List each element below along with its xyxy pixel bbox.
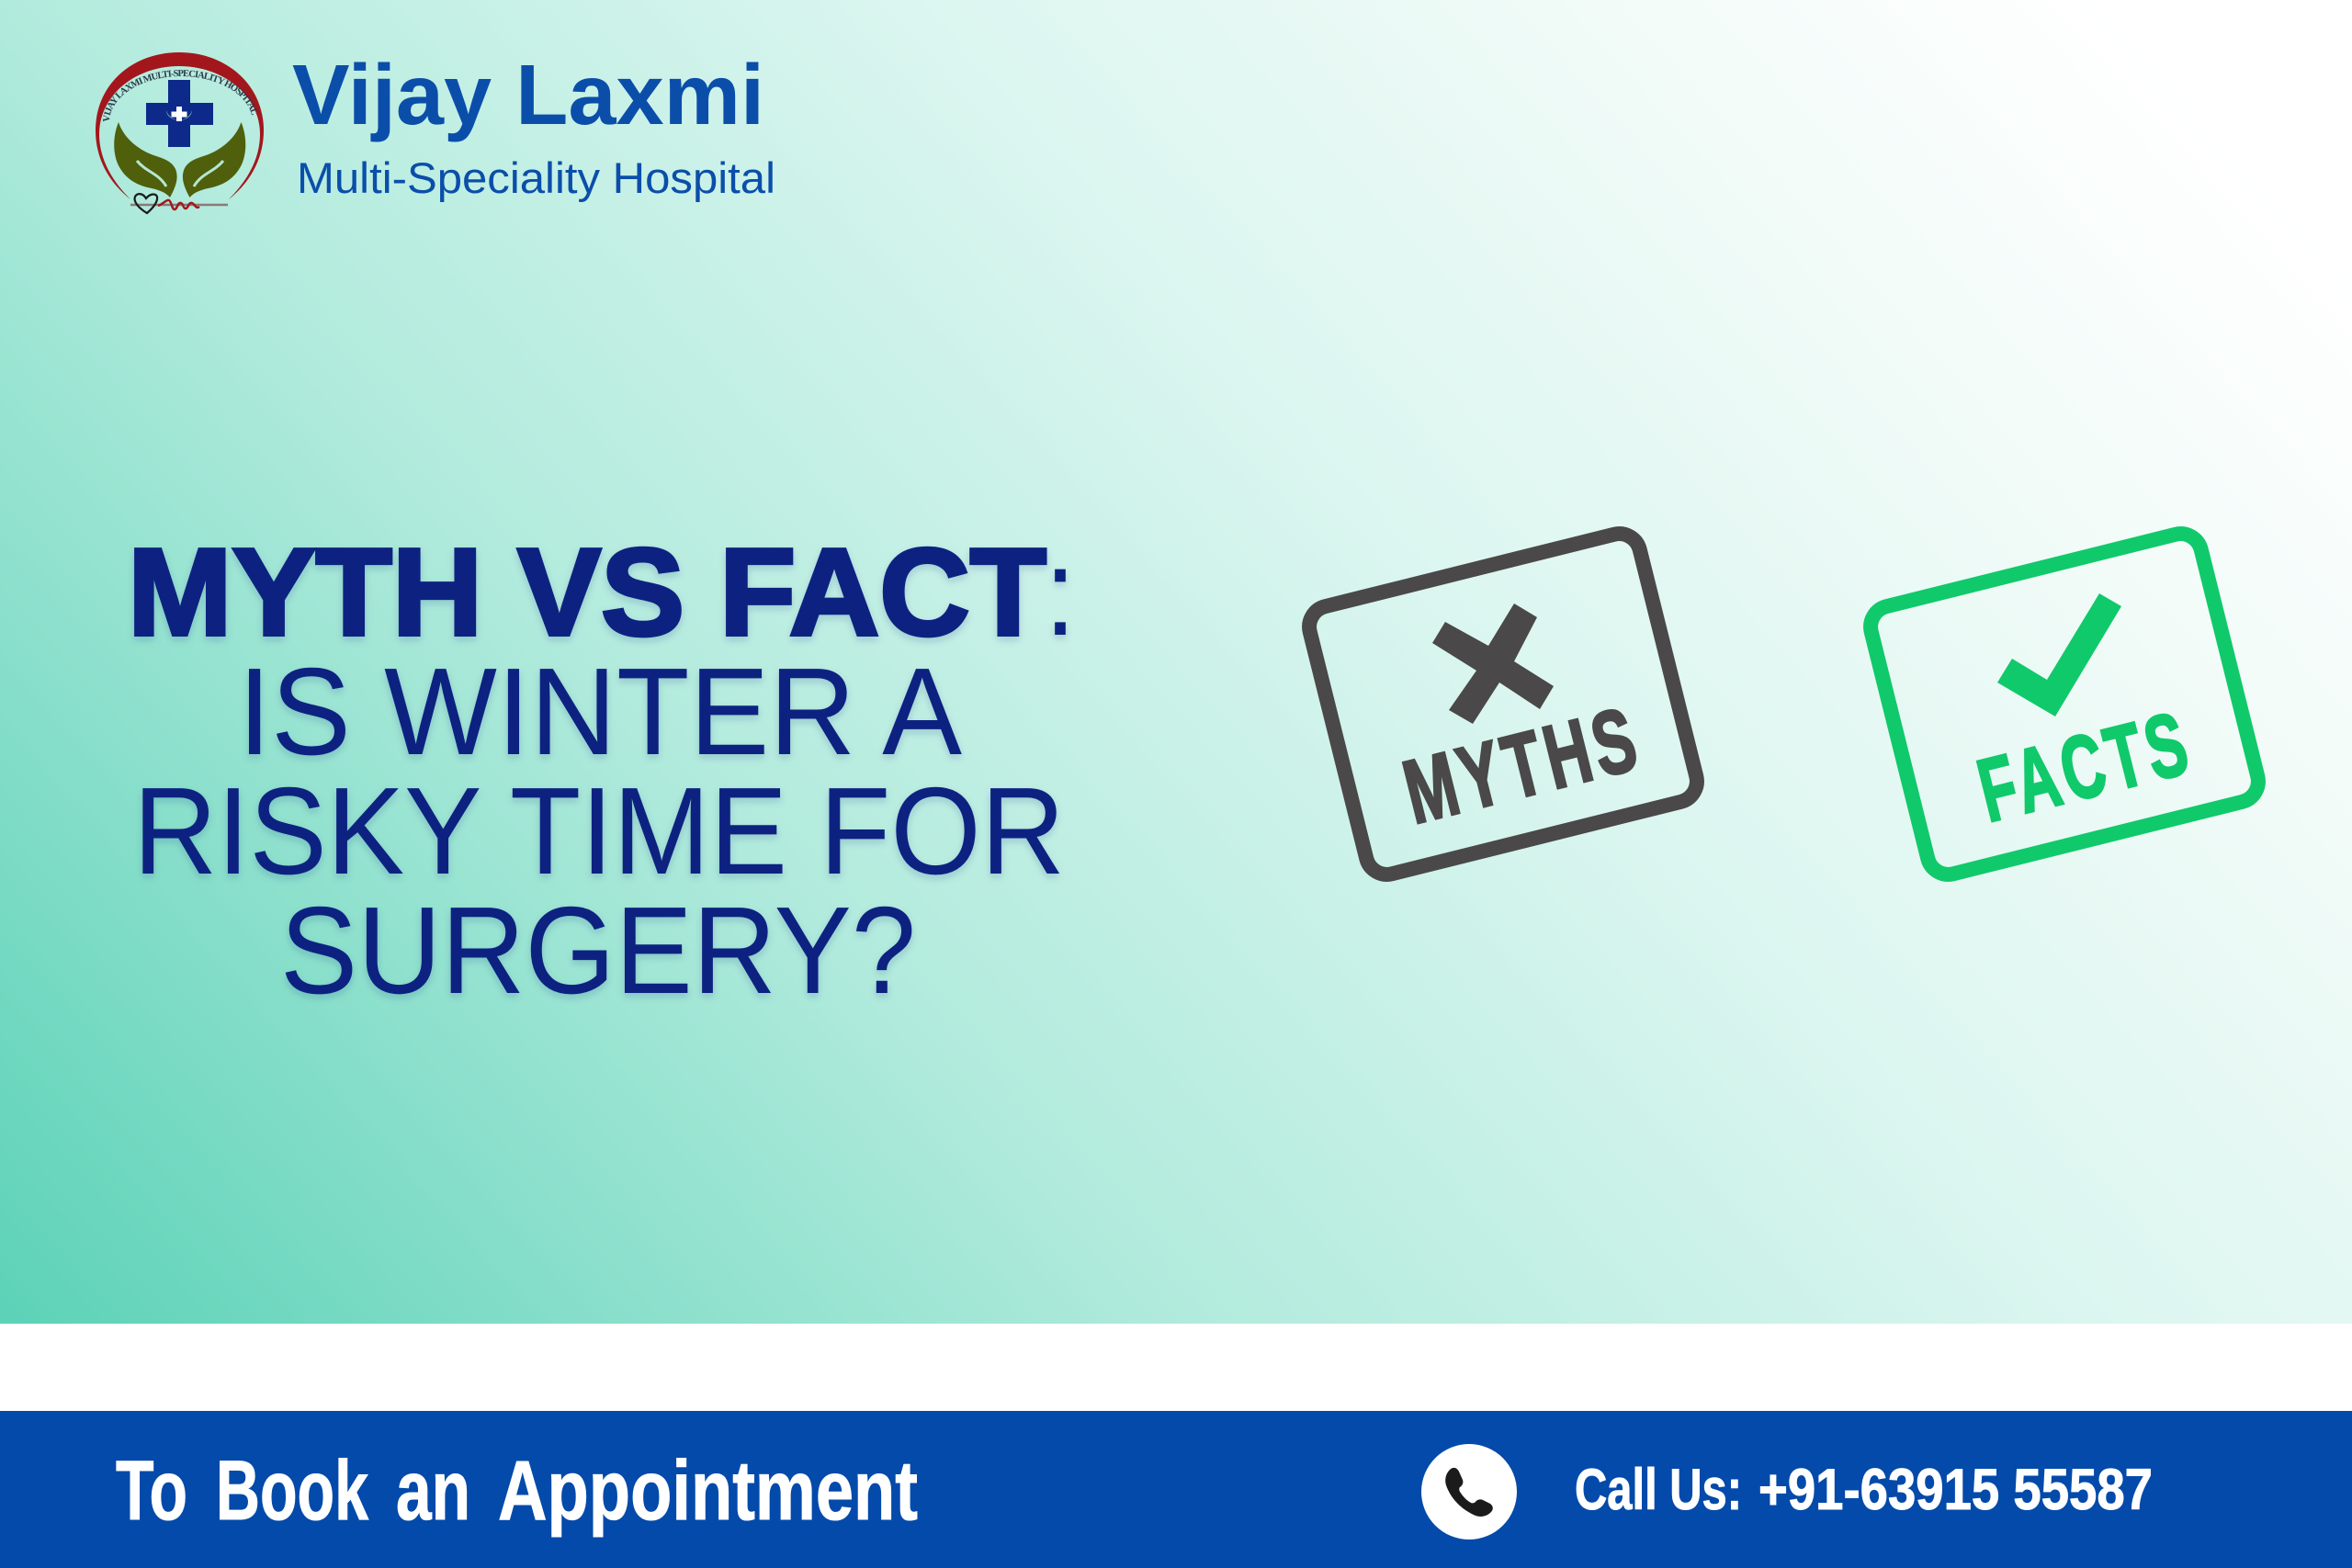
call us text: +91-63915 55587 [1758, 1458, 2153, 1522]
check mark [1997, 593, 2121, 716]
arc lettering: VIJAY LAXMI MULTI-SPECIALITY HOSPITAL [103, 70, 257, 121]
booking text [116, 1444, 918, 1538]
facts label: FACTS [1969, 692, 2201, 840]
blue cross [146, 80, 213, 147]
heart outline [135, 194, 157, 213]
heartbeat baseline [130, 204, 228, 206]
band background [0, 1411, 2352, 1568]
right leaf [183, 122, 245, 197]
title line 3: RISKY TIME FOR [133, 761, 1065, 900]
booking text: an [396, 1444, 470, 1538]
leaf veins [137, 161, 223, 186]
hospital name: Vijay Laxmi [292, 47, 764, 142]
myths stamp [1305, 529, 1702, 879]
stamp frame [1305, 529, 1702, 879]
heartbeat trace [158, 200, 199, 209]
title line 2: IS WINTER A [238, 642, 962, 781]
cross centre mark [166, 107, 192, 121]
booking text: Appointment [498, 1444, 918, 1538]
logo emblem [96, 52, 264, 215]
title line 1: MYTH VS FACT [128, 523, 1046, 661]
call us text [1575, 1458, 2153, 1522]
icon: phone [1421, 1444, 1517, 1540]
booking text: To [116, 1444, 187, 1538]
myths label: MYTHS [1394, 687, 1650, 842]
footer band [0, 1411, 2352, 1568]
red arc [96, 52, 264, 199]
left leaf [114, 122, 177, 197]
title [128, 523, 1076, 1020]
x mark [1432, 604, 1554, 724]
call us text: Call Us: [1575, 1458, 1742, 1522]
booking text: Book [216, 1444, 369, 1538]
title line 4: SURGERY? [280, 881, 916, 1020]
stamp frame [1866, 529, 2263, 879]
facts stamp [1866, 529, 2263, 879]
hospital logo and name [96, 47, 775, 215]
title line 1: : [1045, 523, 1076, 661]
hospital subtitle: Multi-Speciality Hospital [297, 153, 775, 202]
